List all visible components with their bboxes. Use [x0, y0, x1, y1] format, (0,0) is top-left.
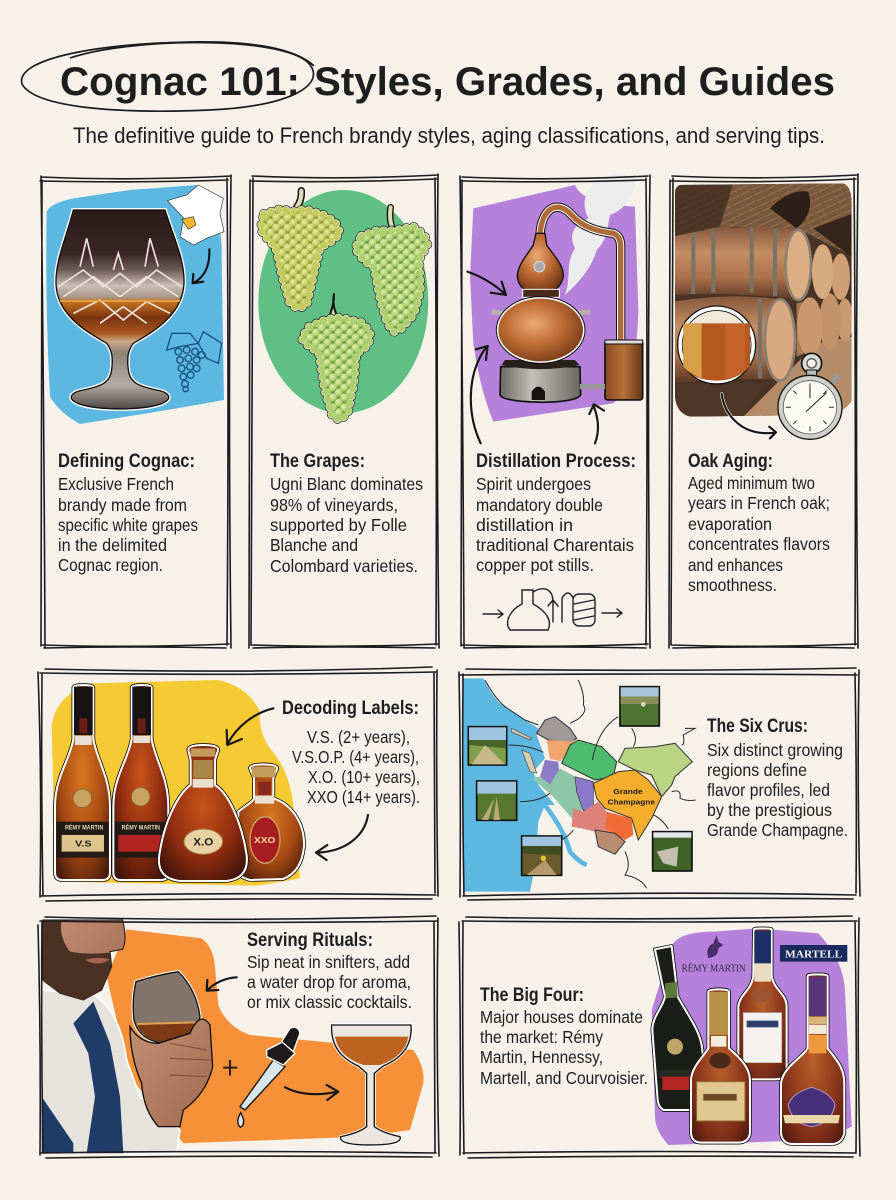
illustration: barrels, sample lens and stopwatch: [673, 182, 853, 439]
text: Big Four body: the market: Rémy: [480, 1027, 603, 1047]
region outlines and rivers: [485, 680, 696, 888]
panel: the big four: [480, 928, 852, 1145]
icon: cocktail coupe: [332, 1025, 411, 1145]
logo: Rémy Martin: [682, 935, 746, 975]
icon: snifter in hand: [130, 972, 213, 1127]
arrow to bottles: [227, 708, 273, 745]
text: age grades: V.S. (2+ years),: [307, 727, 410, 747]
bottle: V.S.: V.S: [75, 838, 92, 848]
purple paint blob: [652, 928, 852, 1145]
text: Serving Rituals body: [247, 952, 412, 1012]
arrow from map to glass: [193, 249, 209, 283]
heading: The Grapes: The Grapes:: [270, 451, 365, 472]
icon: grape bunch bottom: [302, 294, 370, 420]
region: purple west: [540, 760, 560, 784]
arrow from sample to stopwatch: [722, 394, 776, 438]
bottle: V.S.O.P.: [113, 685, 168, 880]
purple paint blob: [470, 185, 638, 422]
text: Defining Cognac body: brandy made from: [58, 495, 187, 515]
text: Serving Rituals body: Sip neat in snifters, add: [247, 952, 410, 972]
text: Oak Aging body: evaporation: [688, 514, 772, 534]
photo inset 4: [620, 687, 659, 726]
text: Oak Aging body: years in French oak;: [688, 493, 830, 513]
illustration: four cognac bottles: [52, 680, 368, 886]
icon: grape line drawing: [167, 332, 222, 392]
icon: copper pot: [492, 312, 590, 313]
text: Six Crus body: flavor profiles, led: [707, 780, 830, 800]
text: Oak Aging body: Aged minimum two: [688, 473, 815, 493]
bottle: Rémy Martin: [652, 946, 703, 1110]
icon: stopwatch: [778, 353, 842, 439]
text: Distillation body: [476, 474, 634, 575]
text: Defining Cognac body: specific white grapes: [58, 515, 198, 535]
map label: [608, 787, 655, 806]
orange paint blob: [107, 929, 424, 1143]
bottle: XXO: XXO: [254, 835, 276, 845]
yellow paint blob: [52, 680, 300, 886]
arrow to XXO bottle: [316, 815, 368, 860]
panel: decoding labels: [52, 680, 420, 886]
icon: still head: [517, 233, 563, 290]
text: age grades: X.O. (10+ years),: [308, 767, 420, 787]
text: Serving Rituals body: or mix classic cocktails.: [247, 992, 412, 1012]
icon: swan neck pipe: [540, 207, 621, 340]
icon: man's shirt and tie: [42, 990, 180, 1153]
text: Distillation body: Spirit undergoes: [476, 474, 591, 494]
bottle: V.S.: [55, 685, 110, 880]
illustration: four cognac house bottles: [652, 928, 852, 1145]
icon: grape bunch left: [261, 191, 340, 308]
region: light green: [618, 743, 692, 797]
plus sign: [223, 1060, 237, 1076]
icon: dropper: [238, 1027, 300, 1127]
logo: Rémy Martin: RÉMY MARTIN: [682, 963, 746, 975]
region: brown: [595, 830, 625, 854]
text: Big Four body: [480, 1007, 648, 1088]
text: Big Four body: Major houses dominate: [480, 1007, 643, 1027]
region: pink: [572, 802, 625, 840]
arrow to coupe: [285, 1085, 338, 1100]
bottle: X.O.: X.O: [193, 837, 213, 849]
icon: small distillation diagram: [483, 589, 622, 630]
text: Distillation body: mandatory double: [476, 495, 603, 515]
text: The Grapes body: Ugni Blanc dominates: [270, 474, 423, 494]
region: peach: [547, 740, 575, 761]
map label: Champagne: [608, 797, 655, 806]
text: Oak Aging body: smoothness.: [688, 575, 777, 595]
text: Oak Aging body: concentrates flavors: [688, 534, 830, 554]
text: The Grapes body: Colombard varieties.: [270, 556, 418, 576]
photo inset 3: [522, 836, 562, 875]
region: Grande Champagne: [593, 770, 662, 840]
bottle: Courvoisier: [781, 974, 844, 1144]
text: The Grapes body: [270, 474, 423, 576]
icon: man's face and beard: [43, 920, 125, 1000]
text: Serving Rituals body: a water drop for aroma,: [247, 972, 411, 992]
text: Six Crus body: Six distinct growing: [707, 740, 843, 760]
bottle: Martell: [738, 928, 787, 1079]
blue paint blob: [46, 185, 224, 424]
photo inset 5: [653, 832, 692, 871]
text: Six Crus body: [707, 740, 848, 840]
text: Defining Cognac body: in the delimited: [58, 535, 167, 555]
text: Big Four body: Martell, and Courvoisier.: [480, 1068, 648, 1088]
bottle: V.S.: RÉMY MARTIN: [65, 822, 103, 831]
illustration: copper pot still: [467, 174, 643, 443]
panel: the six crus: [463, 678, 848, 892]
text: Oak Aging body: and enhances: [688, 555, 783, 575]
panel: serving rituals: [42, 920, 424, 1153]
heading: Oak Aging: Oak Aging:: [688, 451, 773, 472]
region: gray: [537, 717, 577, 743]
title text: Cognac 101: Cognac 101:: [60, 60, 300, 104]
text: Six Crus body: regions define: [707, 760, 807, 780]
bottle: Hennessy: [691, 989, 750, 1143]
icon: grape bunch right: [355, 207, 427, 332]
panel: oak aging: [673, 182, 853, 595]
heading: Distillation Process: Distillation Process:: [476, 451, 636, 472]
logo: Martell: [780, 945, 847, 962]
region: teal: [532, 768, 583, 820]
text: age grades: [292, 727, 420, 807]
text: Distillation body: distillation in: [476, 515, 573, 535]
map: Cognac crus regions: [463, 678, 696, 892]
illustration: grape bunches: [258, 190, 428, 420]
text: Oak Aging body: [688, 473, 830, 595]
text: Defining Cognac body: Exclusive French: [58, 474, 174, 494]
bottle: X.O.: [159, 745, 247, 881]
callout lines: [508, 717, 668, 840]
heading: Defining Cognac: Defining Cognac:: [58, 451, 195, 472]
icon: steam: [565, 174, 635, 295]
text: age grades: V.S.O.P. (4+ years),: [292, 747, 419, 767]
text: The Grapes body: 98% of vineyards,: [270, 495, 398, 515]
region: green: [562, 740, 617, 780]
arrow to snifter: [207, 977, 237, 991]
icon: still collar: [523, 289, 559, 297]
text: age grades: XXO (14+ years).: [307, 787, 420, 807]
text: Defining Cognac body: Cognac region.: [58, 555, 163, 575]
region: orange red: [605, 812, 633, 840]
island and estuary: [511, 728, 537, 773]
bottle: V.S.O.P.: RÉMY MARTIN: [122, 822, 160, 831]
icon: condenser: [605, 341, 643, 400]
bottle: XXO: [237, 764, 304, 880]
map label: Grande: [613, 787, 643, 796]
icon: magnified cognac sample: [678, 306, 756, 384]
text: Defining Cognac body: [58, 474, 198, 575]
title: [22, 42, 835, 111]
panel: the grapes: [258, 190, 428, 576]
logo: Martell: MARTELL: [785, 949, 842, 960]
text: The Grapes body: Blanche and: [270, 535, 358, 555]
heading: The Big Four: The Big Four:: [480, 985, 584, 1006]
icon: burner base: [500, 367, 581, 402]
hand-drawn circle around title: [22, 42, 314, 111]
subtitle: The definitive guide to French brandy styles, aging classifications, and serving tips.: [73, 123, 825, 148]
sea: [463, 678, 555, 892]
illustration: cognac glass with map and grapes: [46, 185, 224, 424]
heading: Serving Rituals: Serving Rituals:: [247, 930, 373, 951]
text: Six Crus body: Grande Champagne.: [707, 820, 848, 840]
text: Six Crus body: by the prestigious: [707, 800, 832, 820]
photo inset 1: [468, 727, 507, 765]
arrows around still: [467, 272, 604, 443]
region: purple east: [575, 777, 593, 811]
icon: map of France: [167, 185, 224, 245]
illustration: man with snifter, dropper and coupe: [42, 920, 424, 1153]
title text: Styles, Grades, and Guides: Styles, Grades, and Guides: [314, 60, 835, 104]
photo: barrel cellar: [673, 182, 853, 418]
text: Distillation body: traditional Charentais: [476, 535, 634, 555]
heading: Decoding Labels: Decoding Labels:: [282, 698, 419, 719]
green paint blob: [258, 190, 428, 413]
panel: defining cognac: [46, 185, 224, 575]
text: Big Four body: Martin, Hennessy,: [480, 1047, 603, 1067]
icon: snifter glass: [56, 210, 184, 409]
text: Distillation body: copper pot stills.: [476, 555, 594, 575]
photo inset 2: [477, 781, 517, 820]
text: The Grapes body: supported by Folle: [270, 515, 407, 535]
panel: distillation process: [467, 174, 643, 630]
heading: The Six Crus: The Six Crus:: [707, 716, 808, 737]
